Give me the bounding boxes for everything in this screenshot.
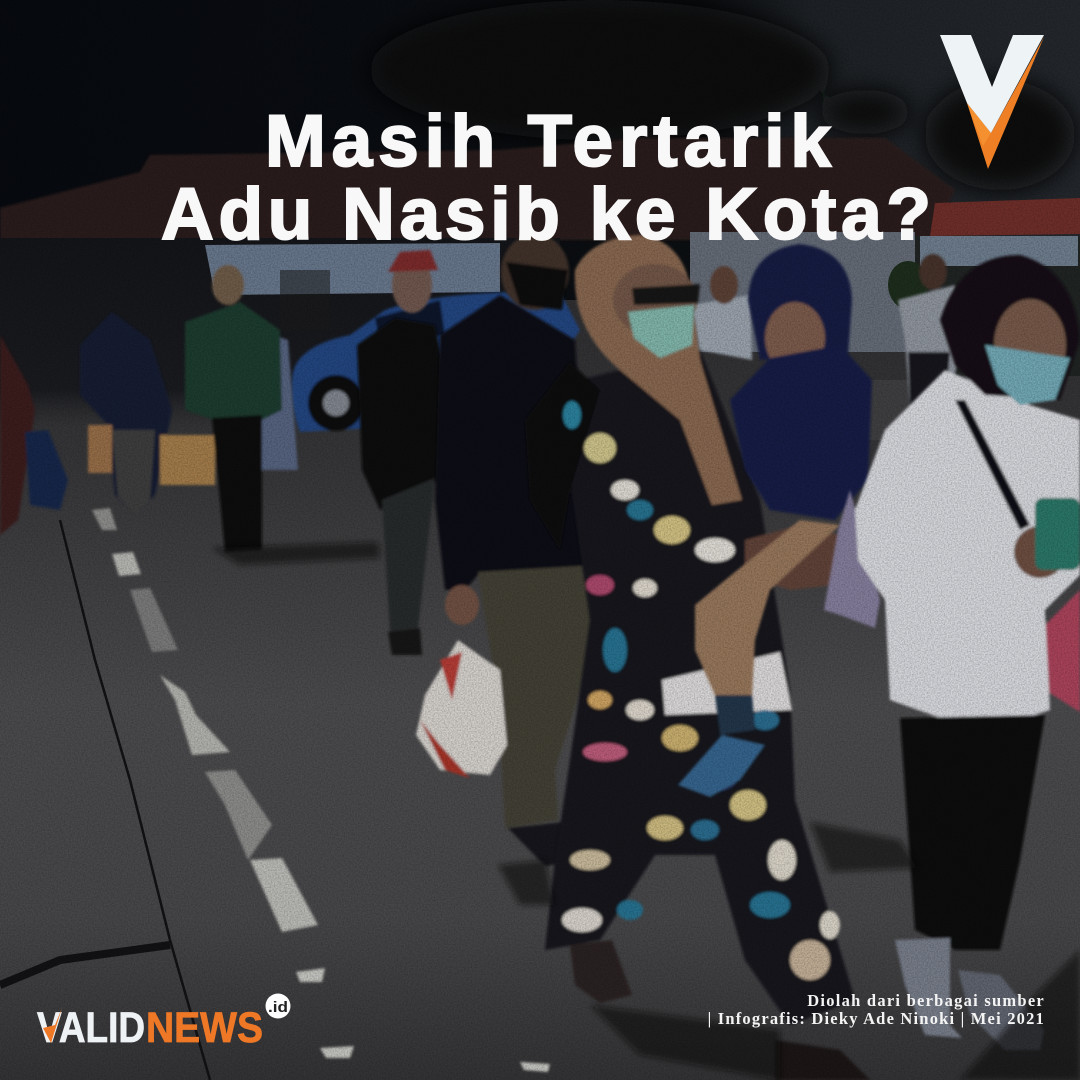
woman in white sweatshirt — [824, 255, 1080, 1050]
child in navy jacket — [678, 244, 872, 797]
forearm holding child — [745, 525, 840, 590]
blue car — [292, 292, 580, 432]
hanging banner — [205, 243, 500, 295]
trees behind the terminal — [370, 0, 1075, 190]
man in black hoodie — [416, 234, 598, 866]
logo: VALIDNEWS.id: NEWS — [146, 1004, 263, 1052]
white shoes — [895, 938, 962, 1038]
source credit: | Infografis: Dieky Ade Ninoki | Mei 2021 — [708, 1009, 1045, 1028]
logo: VALIDNEWS.id: VALID — [37, 1004, 145, 1052]
crowd in the distance — [0, 250, 448, 655]
title: Masih Tertarik — [265, 101, 831, 182]
man with red cap — [357, 318, 448, 510]
title — [161, 101, 931, 255]
road behind at right — [860, 380, 915, 440]
source credit — [708, 991, 1045, 1028]
officer in white shirt (center) — [692, 266, 752, 360]
logo: VALIDNEWS.id: .id — [268, 999, 288, 1016]
plastic bag — [416, 640, 507, 775]
ground shadows — [212, 542, 1080, 1080]
source credit: Diolah dari berbagai sumber — [807, 991, 1045, 1010]
terminal roof — [0, 138, 955, 240]
logo: V mark — [940, 35, 1044, 169]
title: Adu Nasib ke Kota? — [161, 174, 931, 255]
woman's feet — [570, 940, 632, 1003]
woman in hijab carrying child — [525, 235, 870, 1080]
red roof at right — [930, 198, 1080, 236]
officer at right — [898, 254, 960, 410]
tree mid right — [888, 261, 928, 309]
floral pattern — [562, 401, 840, 980]
building wall — [0, 238, 560, 428]
road cracks — [0, 520, 210, 1080]
logo: VALIDNEWS.id — [37, 994, 290, 1052]
road markings — [92, 508, 550, 1072]
